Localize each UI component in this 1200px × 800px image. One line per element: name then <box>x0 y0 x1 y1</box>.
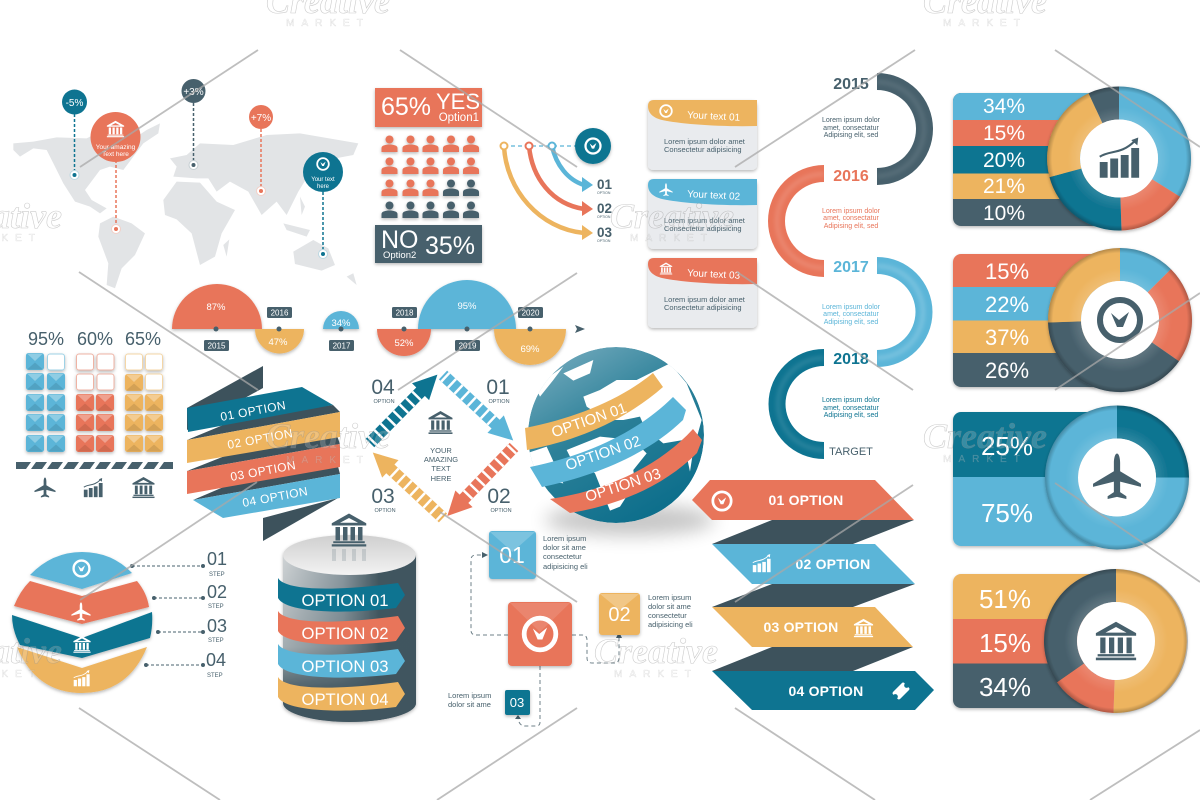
values <box>979 584 1031 702</box>
year tags: 2016 <box>271 308 289 318</box>
step labels: 03 <box>207 616 227 636</box>
stacked arrow options <box>692 480 934 710</box>
2018 arc: Lorem ipsum dolor <box>822 397 881 404</box>
values: 26% <box>985 358 1029 383</box>
step labels: STEP <box>207 673 223 679</box>
donut <box>1047 86 1191 231</box>
2018 arc: TARGET <box>829 446 873 458</box>
percent labels: 52% <box>394 338 414 349</box>
ribbon option 02 <box>530 397 686 487</box>
center icon and text: YOUR <box>430 446 452 455</box>
square 02 <box>599 593 640 635</box>
yes banner: YES <box>436 89 480 114</box>
card 2: Lorem ipsum dolor amet <box>664 216 746 225</box>
arrow 01: OPTION <box>597 191 611 195</box>
option 01 <box>187 387 333 432</box>
donut panel 3 <box>953 406 1189 550</box>
card 2: Your text 02 <box>687 189 741 203</box>
values <box>985 259 1029 383</box>
arrow 03 <box>500 142 613 243</box>
coral column <box>76 354 114 452</box>
curved arrows from clock node <box>500 128 613 243</box>
bands <box>953 412 1096 546</box>
pin: your amazing text here: Text here <box>102 151 129 158</box>
2015 arc <box>822 73 933 185</box>
option 04 <box>193 474 340 518</box>
2017 arc: Lorem ipsum dolor <box>822 304 881 311</box>
year tags: 2020 <box>522 308 540 318</box>
no banner: 35% <box>425 232 475 260</box>
block columns chart <box>16 329 173 498</box>
values: 75% <box>981 498 1033 528</box>
square 03 <box>505 690 530 715</box>
watermarks: MARKET <box>614 669 698 680</box>
text 02: consectetur <box>648 611 687 620</box>
option 04 <box>278 677 405 711</box>
percent labels: 34% <box>331 318 351 329</box>
text 02 <box>648 593 693 629</box>
pin: +7% <box>249 105 273 196</box>
text 03: dolor sit ame <box>448 700 491 709</box>
cycle numbers: 02 <box>487 485 511 508</box>
arrow 01 <box>548 142 613 195</box>
2015 arc: amet, consectatur <box>823 125 879 132</box>
percent labels: 87% <box>206 302 226 313</box>
step labels: 04 <box>206 650 226 670</box>
arrow 03 amber <box>365 444 451 527</box>
arrow 03: OPTION <box>597 239 611 243</box>
cycle numbers: 03 <box>371 485 395 508</box>
square 01 <box>489 531 536 579</box>
step labels: 02 <box>207 582 227 602</box>
arrow 01 sky <box>435 366 521 449</box>
cycle numbers: OPTION <box>373 399 395 405</box>
percent labels: 69% <box>520 344 540 355</box>
arrow 03: 03 <box>597 225 613 240</box>
segment 3 bank <box>12 612 152 658</box>
text 02: dolor sit ame <box>648 602 691 611</box>
donut panel 4 <box>953 569 1188 713</box>
diamond arrow cycle <box>361 366 523 527</box>
values: 34% <box>983 95 1025 118</box>
column icons <box>34 477 155 498</box>
values <box>983 95 1025 225</box>
03 option <box>712 607 913 647</box>
year tags: 2018 <box>396 308 414 318</box>
ribbon option 03 <box>550 429 702 513</box>
cycle numbers: 04 <box>371 376 395 399</box>
02 option <box>712 544 915 584</box>
bands <box>953 254 1096 387</box>
arrow 02: OPTION <box>597 215 611 219</box>
cylinder body <box>283 535 416 722</box>
step labels <box>130 549 227 679</box>
map landmasses <box>13 123 358 288</box>
card 1: Lorem ipsum dolor amet <box>664 137 746 146</box>
2017 arc: 2017 <box>833 259 869 276</box>
yes banner: 65% <box>381 93 431 121</box>
values: 10% <box>983 202 1025 225</box>
square 03: 03 <box>510 695 524 710</box>
text cards <box>648 100 757 328</box>
2016 arc: Lorem ipsum dolor <box>822 208 881 215</box>
pin: -5% <box>62 90 87 180</box>
text 03 <box>448 691 491 709</box>
ribbon option 02: OPTION 02 <box>563 433 643 474</box>
center icon and text: TEXT <box>431 464 451 473</box>
2016 arc: 2016 <box>833 168 869 185</box>
arrow 04 teal <box>361 366 446 451</box>
04 option <box>712 671 934 710</box>
2018 arc: 2018 <box>833 351 869 368</box>
values: 22% <box>985 292 1029 317</box>
ribbon option 01 <box>525 373 663 450</box>
bands <box>953 574 1096 708</box>
watermarks: MARKET <box>286 18 370 29</box>
year tags <box>204 307 585 351</box>
donut <box>1045 406 1189 550</box>
2015 arc: Adipising elit, sed <box>824 132 878 139</box>
option 01 <box>278 578 405 612</box>
option 02 <box>278 611 405 645</box>
percent labels: 95% <box>457 301 477 312</box>
pin: +3%: +3% <box>183 87 204 98</box>
2016 arc: amet, consectatur <box>823 215 879 222</box>
pin: your text here <box>303 152 343 258</box>
segment 2 plane <box>14 581 149 624</box>
text 02: adipisicing eli <box>648 620 693 629</box>
square 01: 01 <box>499 542 525 568</box>
segmented sphere steps <box>12 549 227 693</box>
step labels: STEP <box>209 572 225 578</box>
semicircle values <box>172 280 566 365</box>
cycle numbers: OPTION <box>374 508 396 514</box>
03 option: 03 OPTION <box>764 619 838 635</box>
text 01 <box>543 534 588 571</box>
world map with pins <box>13 79 358 288</box>
2018 arc: Adipising elit, sed <box>824 412 878 419</box>
values: 25% <box>981 431 1033 461</box>
donut panel 2 <box>953 248 1192 392</box>
option 02: 02 OPTION <box>226 426 294 452</box>
watermarks <box>0 0 1047 680</box>
arrow 01: 01 <box>597 177 613 192</box>
ribbon option 03: OPTION 03 <box>583 465 663 506</box>
no banner: Option2 <box>383 250 416 261</box>
center icon and text <box>424 411 458 483</box>
values: 20% <box>983 149 1025 172</box>
sky column <box>26 353 65 452</box>
cycle numbers <box>371 376 512 514</box>
donut panel 1 <box>953 86 1191 231</box>
column percentages: 65% <box>125 329 161 349</box>
values: 15% <box>985 259 1029 284</box>
bank on top <box>332 514 366 561</box>
card 1: Your text 01 <box>687 110 741 124</box>
cycle numbers: OPTION <box>490 508 512 514</box>
text 03: Lorem ipsum <box>448 691 491 700</box>
option 04: OPTION 04 <box>302 690 388 709</box>
folded ribbon options <box>187 366 340 541</box>
year tags: 2015 <box>208 342 226 350</box>
text 01: Lorem ipsum <box>543 534 586 543</box>
pin: -5%: -5% <box>66 98 83 109</box>
year tags: 2019 <box>459 342 477 350</box>
card 1: Consectetur adipisicing <box>664 145 742 154</box>
text 01: adipisicing eli <box>543 562 588 571</box>
no banner: NO <box>381 226 418 254</box>
square flow diagram <box>448 531 693 726</box>
values: 21% <box>983 175 1025 198</box>
amber column <box>125 354 163 452</box>
hatched baseline <box>16 462 173 469</box>
2018 arc <box>769 349 881 459</box>
year tags: 2017 <box>333 342 351 350</box>
segment 1 clock <box>30 552 132 589</box>
2016 arc: Adipising elit, sed <box>824 223 878 230</box>
2016 arc <box>768 165 881 277</box>
watermarks: Creative <box>923 416 1047 456</box>
card 3: Your text 03 <box>687 268 741 282</box>
values: 15% <box>979 628 1031 658</box>
card 1 <box>648 100 757 170</box>
ribbon folds <box>187 366 340 541</box>
globe sphere <box>527 347 704 523</box>
watermarks: MARKET <box>943 454 1027 465</box>
step labels: STEP <box>208 638 224 644</box>
people pictogram <box>382 136 479 218</box>
watermarks: Creative <box>266 416 390 456</box>
column percentages: 95% <box>28 329 64 349</box>
pin: your amazing text here: Your amazing <box>96 144 136 151</box>
cycle numbers: OPTION <box>488 399 510 405</box>
watermarks: Creative <box>594 631 718 671</box>
center icon and text: AMAZING <box>424 455 458 464</box>
pin: +3% <box>182 79 206 170</box>
arrow 02 coral <box>439 439 523 524</box>
values: 37% <box>985 325 1029 350</box>
option 01: OPTION 01 <box>302 591 388 610</box>
percent labels: 47% <box>268 337 288 348</box>
donut <box>1044 569 1188 713</box>
watermarks: MARKET <box>630 233 714 244</box>
globe with ribbons <box>525 347 715 536</box>
2017 arc: Adipising elit, sed <box>824 319 878 326</box>
option 03 <box>187 444 340 494</box>
clock node <box>575 128 611 164</box>
option 01: 01 OPTION <box>219 398 287 424</box>
option 02 <box>187 412 340 463</box>
arrow 02: 02 <box>597 201 612 216</box>
2015 arc: 2015 <box>833 76 869 93</box>
dark folds <box>712 520 915 671</box>
04 option: 04 OPTION <box>789 683 863 699</box>
pin: your amazing text here <box>90 112 140 234</box>
card 2 <box>648 179 757 249</box>
text 01: consectetur <box>543 552 582 561</box>
column percentages: 60% <box>77 329 113 349</box>
dashed connectors <box>471 555 619 726</box>
watermarks: MARKET <box>943 18 1027 29</box>
option 03: 03 OPTION <box>229 458 297 484</box>
text 02: Lorem ipsum <box>648 593 691 602</box>
02 option: 02 OPTION <box>796 556 870 572</box>
center clock square <box>508 602 572 666</box>
half circle timeline <box>172 280 585 365</box>
2018 arc: amet, consectatur <box>823 405 879 412</box>
pin: your text here: Your text <box>311 177 335 183</box>
2017 arc: amet, consectatur <box>823 311 879 318</box>
01 option: 01 OPTION <box>769 492 843 508</box>
square 02: 02 <box>608 604 631 626</box>
yes banner: Option1 <box>439 112 479 124</box>
arrow 02 <box>526 142 612 219</box>
cycle numbers: 01 <box>486 376 510 399</box>
option 02: OPTION 02 <box>302 624 388 643</box>
values <box>981 431 1033 528</box>
card 3: Consectetur adipisicing <box>664 303 742 312</box>
yes banner <box>375 88 482 127</box>
watermarks: Creative <box>610 196 734 236</box>
card 2: Consectetur adipisicing <box>664 224 742 233</box>
pin: +7%: +7% <box>251 113 271 124</box>
01 option <box>692 480 914 520</box>
watermarks: MARKET <box>286 455 370 466</box>
values: 34% <box>979 672 1031 702</box>
yes / no people chart <box>375 88 482 263</box>
option 04: 04 OPTION <box>241 484 309 510</box>
percent labels <box>206 301 540 355</box>
cylinder options <box>278 514 416 722</box>
no banner <box>375 225 482 263</box>
center icon and text: HERE <box>431 474 451 483</box>
segment 4 chart <box>17 647 147 693</box>
card 3 <box>648 258 757 328</box>
text 01: dolor sit ame <box>543 543 586 552</box>
values: 15% <box>983 122 1025 145</box>
2017 arc <box>822 257 933 367</box>
bands <box>953 93 1096 226</box>
values: 51% <box>979 584 1031 614</box>
ribbon option 01: OPTION 01 <box>549 400 629 441</box>
step labels: 01 <box>207 549 227 569</box>
year arc timeline <box>768 73 933 459</box>
column percentages <box>28 329 161 349</box>
step labels: STEP <box>208 604 224 610</box>
option 03: OPTION 03 <box>302 657 388 676</box>
card 3: Lorem ipsum dolor amet <box>664 295 746 304</box>
option 03 <box>278 644 405 678</box>
2015 arc: Lorem ipsum dolor <box>822 117 881 124</box>
pin: your text here: here <box>317 184 330 190</box>
donut <box>1048 248 1192 392</box>
